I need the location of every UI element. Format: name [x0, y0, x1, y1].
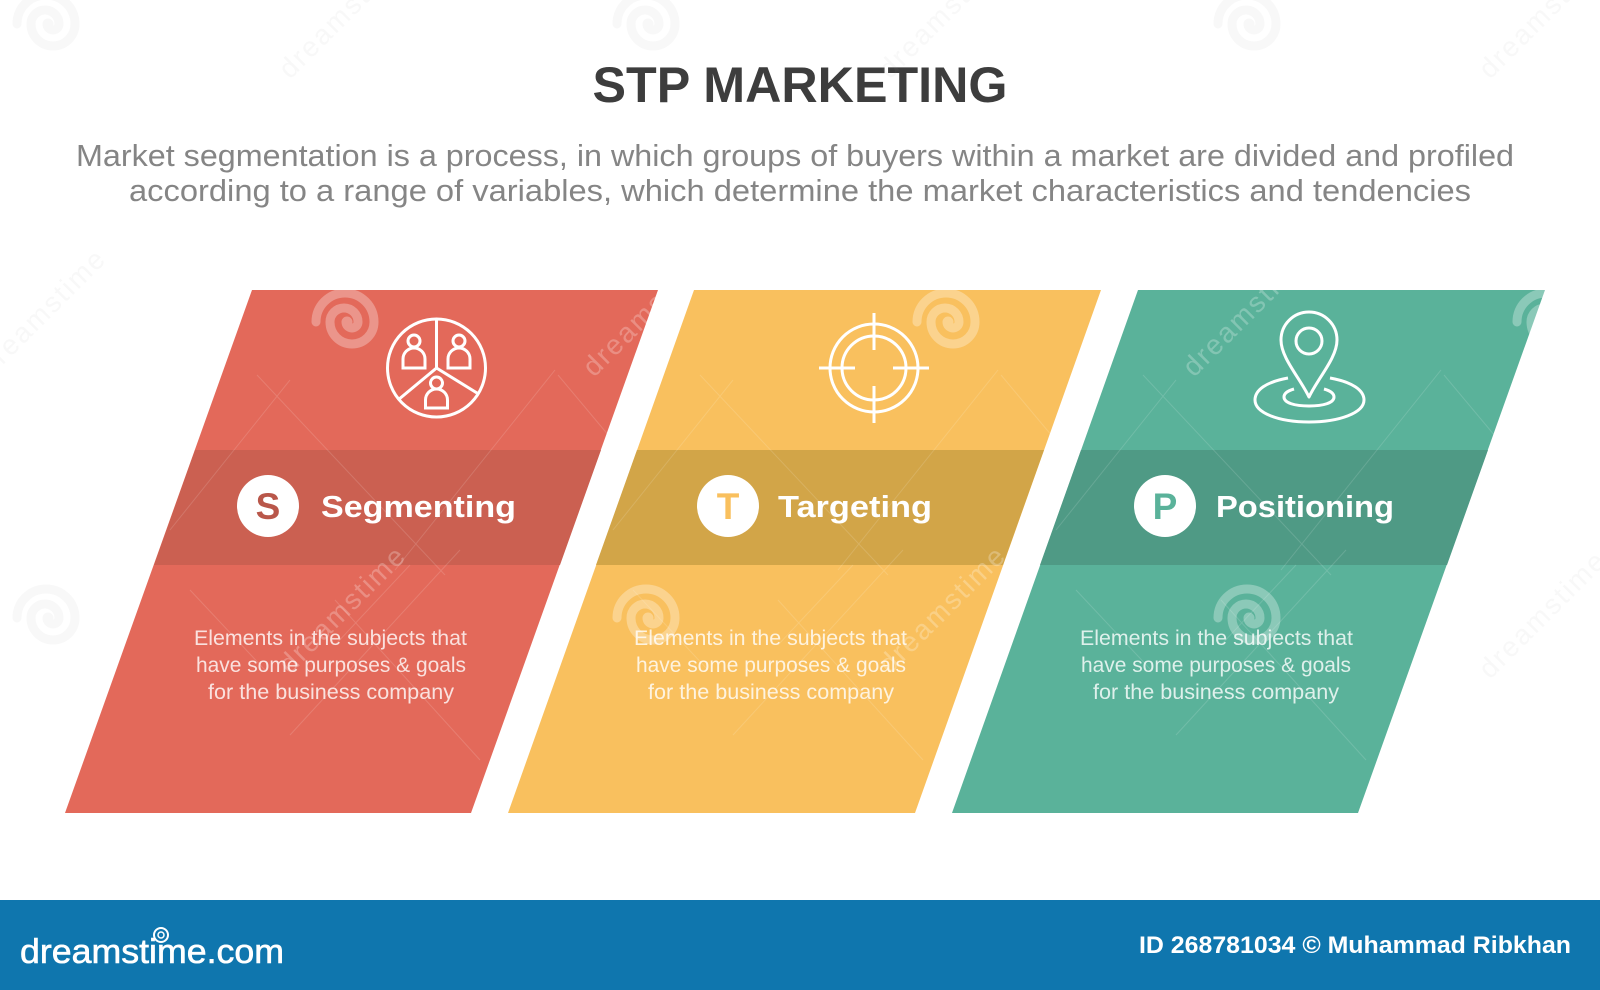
band: targeting — [596, 450, 1044, 565]
subtitle text block: according to a range of variables, which determine the market characteristics and tendencies — [129, 173, 1471, 208]
subtitle text block — [76, 138, 1514, 208]
footer logo: dreamstime.com — [20, 933, 284, 971]
body text: positioning: Elements in the subjects that — [1080, 627, 1353, 650]
body text: positioning: have some purposes & goals — [1081, 654, 1351, 677]
watermark overlay: dreamstime — [272, 541, 411, 679]
body text: segmenting: Elements in the subjects that — [194, 627, 467, 650]
panel: targeting — [508, 290, 1101, 813]
icon: letter S badge: S — [256, 486, 280, 527]
subtitle text block: Market segmentation is a process, in which groups of buyers within a market are divided and profiled — [76, 138, 1514, 173]
heading: segmenting: Segmenting — [321, 489, 516, 524]
heading: positioning: Positioning — [1216, 489, 1394, 524]
watermark overlay: dreamstime — [576, 244, 715, 382]
icon: letter T badge: T — [717, 486, 740, 527]
icon: crosshair target — [819, 313, 929, 423]
body text: segmenting: for the business company — [208, 681, 455, 704]
icon: letter P badge — [1134, 475, 1196, 537]
body text: targeting: have some purposes & goals — [636, 654, 906, 677]
heading: targeting: Targeting — [778, 489, 932, 524]
footer credit: ID 268781034 © Muhammad Ribkhan — [1139, 932, 1571, 959]
body text: positioning — [1080, 627, 1353, 704]
icon: audience segments — [388, 319, 486, 417]
icon: letter T badge — [697, 475, 759, 537]
body text: targeting: Elements in the subjects that — [634, 627, 907, 650]
panel: segmenting — [65, 290, 658, 813]
body text: targeting: for the business company — [648, 681, 895, 704]
watermark overlay — [0, 0, 1600, 760]
icon: letter S badge — [237, 475, 299, 537]
watermark overlay: dreamstime — [1176, 244, 1315, 382]
panel: positioning — [952, 290, 1545, 813]
icon: location pin — [1255, 312, 1364, 422]
body text: segmenting — [194, 627, 467, 704]
body text: segmenting: have some purposes & goals — [196, 654, 466, 677]
band: positioning — [1040, 450, 1488, 565]
watermark overlay: dreamstime — [872, 541, 1011, 679]
band: segmenting — [154, 450, 601, 565]
title: STP MARKETING — [592, 57, 1008, 113]
body text: positioning: for the business company — [1093, 681, 1340, 704]
body text: targeting — [634, 627, 907, 704]
footer bar — [0, 900, 1600, 990]
icon: letter P badge: P — [1153, 486, 1177, 527]
